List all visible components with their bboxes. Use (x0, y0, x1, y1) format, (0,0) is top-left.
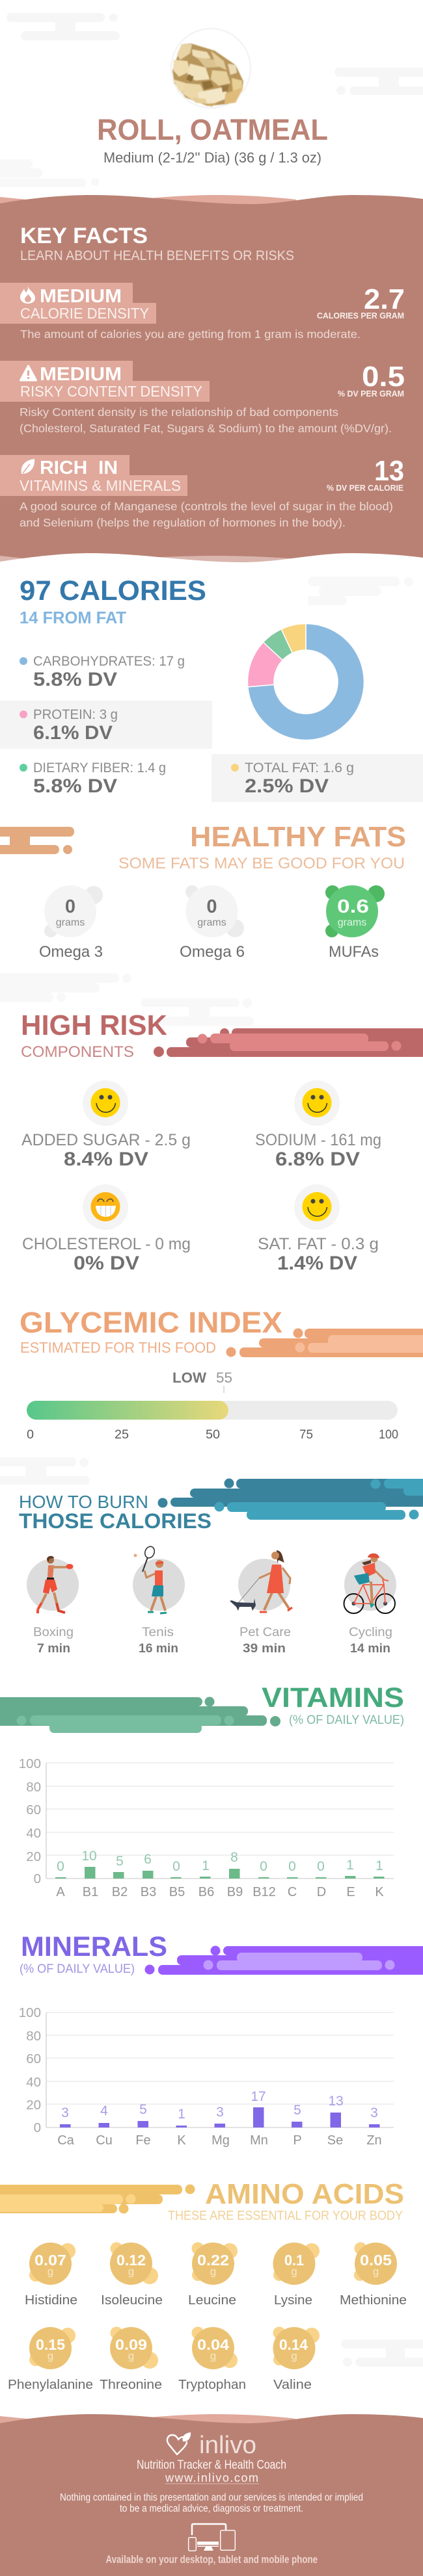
chart: vitamins bar chart: B9 (227, 1885, 243, 1899)
risk item: sodium: 6.8% DV (275, 1149, 360, 1170)
chart: minerals bar chart: 5 (139, 2102, 147, 2117)
risk item: saturated fat: SAT. FAT - 0.3 g (258, 1235, 379, 1253)
chart: glycemic index gauge: 100 (379, 1428, 398, 1442)
fact: rich in vitamins and minerals: % DV PER CALORIE (327, 483, 403, 493)
chart: minerals bar chart: 3 (370, 2105, 378, 2120)
chart: minerals bar chart: 3 (61, 2105, 69, 2120)
chart: vitamins bar chart: 40 (26, 1826, 41, 1841)
risk item: cholesterol: CHOLESTEROL - 0 mg (22, 1235, 191, 1253)
amino: methionine: g (373, 2265, 379, 2278)
fat: omega 6: Omega 6 (180, 943, 245, 961)
chart: vitamins bar chart: 10 (81, 1849, 97, 1864)
chart: minerals bar chart: 4 (100, 2103, 108, 2118)
subheading: vitamins: (% OF DAILY VALUE) (289, 1713, 404, 1727)
chart: minerals bar chart: 80 (26, 2029, 41, 2044)
title: ROLL, OATMEAL (97, 113, 328, 146)
chart: vitamins bar chart: 0 (288, 1859, 296, 1874)
website link: www.inlivo.com (165, 2471, 258, 2484)
chart: minerals bar chart: 100 (19, 2005, 41, 2020)
amino: lysine: 0.1 (284, 2252, 304, 2269)
macro: dietary fiber: 5.8% DV (33, 775, 117, 797)
cloud: calories (308, 577, 413, 605)
chart: minerals bar chart: 20 (26, 2098, 41, 2113)
macro: total fat (212, 754, 423, 802)
amino: leucine: 0.22 (197, 2252, 229, 2269)
chart: minerals bar chart: 5 (293, 2103, 301, 2118)
chart: vitamins bar chart: B5 (169, 1885, 185, 1899)
risk item: added sugar: ADDED SUGAR - 2.5 g (21, 1131, 191, 1149)
amino: histidine: 0.07 (34, 2252, 66, 2269)
amino: isoleucine: 0.12 (116, 2252, 146, 2269)
section: healthy fats (0, 821, 406, 961)
amino: phenylalanine: g (48, 2350, 53, 2362)
chart: minerals bar chart: 17 (251, 2089, 266, 2104)
amino: isoleucine: Isoleucine (101, 2293, 163, 2308)
amino: phenylalanine: Phenylalanine (8, 2378, 93, 2392)
amino: methionine (340, 2243, 407, 2308)
subheading: minerals: (% OF DAILY VALUE) (20, 1962, 135, 1976)
activity: tennis: Tenis (142, 1626, 174, 1639)
risk item: sodium: SODIUM - 161 mg (255, 1131, 381, 1149)
banner: vitamins (0, 1697, 280, 1733)
fat: omega 6 (180, 885, 245, 961)
chart: vitamins bar chart: 0 (57, 1859, 64, 1874)
disclaimer: to be a medical advice, diagnosis or treatment. (120, 2503, 303, 2514)
macro: carbohydrates: 5.8% DV (33, 669, 117, 690)
fact: rich in vitamins and minerals: 13 (374, 455, 404, 487)
amino: leucine: g (210, 2265, 216, 2278)
activity: boxing (27, 1556, 79, 1656)
amino: valine: 0.14 (279, 2336, 308, 2353)
amino: phenylalanine (8, 2327, 93, 2392)
chart: minerals bar chart: P (293, 2133, 302, 2148)
section: minerals (19, 1931, 423, 2148)
icon: warning triangle (21, 366, 36, 380)
section: amino acids (0, 2178, 423, 2392)
amino: valine: Valine (273, 2378, 312, 2392)
risk item: cholesterol: 0% DV (74, 1253, 139, 1274)
section: vitamins (0, 1682, 404, 1899)
amino: tryptophan (178, 2327, 246, 2392)
icon: boxer (38, 1556, 73, 1613)
chart: vitamins bar chart: 0 (34, 1871, 41, 1886)
activity: pet care: 39 min (243, 1642, 286, 1656)
chart: vitamins bar chart: D (317, 1885, 326, 1899)
heading: amino acids: AMINO ACIDS (205, 2178, 404, 2210)
macro: protein: PROTEIN: 3 g (33, 707, 118, 722)
fact: rich in vitamins and minerals (0, 455, 404, 529)
serving size: Medium (2-1/2'' Dia) (36 g / 1.3 oz) (103, 150, 321, 166)
chart: vitamins bar chart: K (375, 1885, 384, 1899)
fat: MUFAs: grams (338, 917, 366, 928)
section: high risk (0, 973, 423, 1274)
fact: risky content density: MEDIUM (40, 364, 122, 385)
amino: valine: g (291, 2350, 297, 2362)
icon: leaf (21, 459, 34, 474)
logo wordmark: inlivo (199, 2432, 256, 2459)
chart: glycemic index gauge: 50 (206, 1428, 220, 1442)
section: how to burn calories (0, 1457, 423, 1656)
subheading: 14 from fat: 14 FROM FAT (20, 608, 126, 627)
label: low 55: LOW (172, 1370, 206, 1386)
fat: omega 3 (39, 885, 103, 961)
subheading: amino acids: THESE ARE ESSENTIAL FOR YOUR BODY (168, 2209, 403, 2223)
fact: risky content density: 0.5 (362, 361, 405, 393)
heading: minerals: MINERALS (21, 1931, 167, 1962)
icon: tennis player (134, 1545, 167, 1613)
chart: vitamins bar chart: B6 (198, 1885, 214, 1899)
fact: risky content density: RISKY CONTENT DENSITY (20, 383, 202, 400)
cloud: top left (7, 13, 120, 40)
chart: vitamins bar chart: B2 (112, 1885, 128, 1899)
fact: calorie density: MEDIUM (40, 286, 122, 307)
header section (0, 13, 423, 187)
macro: protein (0, 701, 212, 749)
chart: vitamins bar chart: 0 (317, 1859, 325, 1874)
cloud: high risk left (0, 973, 131, 1002)
section: glycemic index (20, 1306, 423, 1442)
fat: omega 6: 0 (206, 896, 217, 917)
risk item: cholesterol (22, 1184, 191, 1274)
chart: minerals bar chart: Mn (250, 2133, 268, 2148)
chart: minerals bar chart: Se (327, 2133, 343, 2148)
activity: pet care (230, 1550, 292, 1656)
activity: cycling: Cycling (349, 1626, 392, 1639)
chart: vitamins bar chart: A (56, 1885, 65, 1899)
amino: tryptophan: 0.04 (197, 2336, 229, 2353)
banner: amino acids (0, 2184, 195, 2214)
banner: glycemic index (226, 1329, 423, 1357)
chart: minerals bar chart (19, 2005, 394, 2148)
heading: key facts: KEY FACTS (20, 224, 148, 248)
fact: rich in vitamins and minerals: RICH IN (40, 458, 118, 478)
chart: vitamins bar chart: B1 (83, 1885, 98, 1899)
chart: vitamins bar chart: 6 (144, 1852, 152, 1867)
chart: vitamins bar chart (19, 1756, 394, 1899)
icon: devices (189, 2524, 235, 2551)
label: low 55: 55 (216, 1370, 232, 1386)
risk item: added sugar (21, 1080, 191, 1170)
amino: histidine: Histidine (25, 2293, 77, 2308)
amino: threonine: Threonine (100, 2378, 162, 2392)
activity: boxing: Boxing (33, 1626, 74, 1639)
fat: MUFAs: 0.6 (337, 896, 369, 917)
fact: risky content density (0, 361, 405, 435)
fat: omega 6: grams (197, 917, 226, 928)
risk item: added sugar: 8.4% DV (64, 1149, 148, 1170)
chart: vitamins bar chart: C (288, 1885, 297, 1899)
chart: glycemic index gauge: 0 (27, 1428, 34, 1442)
disclaimer: Nothing contained in this presentation and our services is intended or implied (60, 2492, 363, 2503)
chart: minerals bar chart: Zn (366, 2133, 382, 2148)
heading: high risk: HIGH RISK (21, 1009, 167, 1041)
chart: minerals bar chart: Ca (57, 2133, 75, 2148)
fact: risky content density: Risky Content density is the relationship of bad components (20, 406, 338, 419)
panel: footer (0, 2414, 423, 2576)
tagline: Nutrition Tracker & Health Coach (137, 2458, 286, 2472)
subheading: key facts: LEARN ABOUT HEALTH BENEFITS OR RISKS (20, 248, 294, 263)
icon: cyclist (344, 1554, 395, 1613)
panel: key facts (0, 195, 423, 566)
chart: minerals bar chart: Cu (96, 2133, 113, 2148)
cloud: amino right (341, 2339, 423, 2367)
activity: tennis (133, 1545, 185, 1656)
chart: vitamins bar chart: B3 (141, 1885, 156, 1899)
banner: healthy fats cloud (0, 827, 74, 854)
chart: vitamins bar chart: 0 (260, 1859, 267, 1874)
chart: vitamins bar chart: 80 (26, 1780, 41, 1795)
chart: minerals bar chart: Mg (212, 2133, 230, 2148)
amino: isoleucine: g (128, 2265, 134, 2278)
macro: total fat: TOTAL FAT: 1.6 g (245, 761, 354, 775)
amino: methionine: 0.05 (360, 2252, 392, 2269)
chart: glycemic index gauge (27, 1401, 398, 1442)
risk item: saturated fat: 1.4% DV (277, 1253, 357, 1274)
cloud: lower left (0, 159, 99, 187)
fact: rich in vitamins and minerals: VITAMINS & MINERALS (20, 477, 181, 494)
fat: MUFAs (325, 885, 385, 961)
banner: high risk (154, 1028, 423, 1057)
icon: flame (20, 286, 35, 304)
chart: vitamins bar chart: 60 (26, 1802, 41, 1817)
fact: calorie density: 2.7 (364, 283, 405, 315)
heading: those calories: THOSE CALORIES (19, 1509, 212, 1533)
heading: vitamins: VITAMINS (262, 1682, 404, 1713)
chart: glycemic index gauge: 75 (299, 1428, 313, 1442)
cloud: burn left (0, 1457, 90, 1485)
amino: tryptophan: Tryptophan (178, 2378, 246, 2392)
chart: glycemic index gauge: 25 (115, 1428, 129, 1442)
fact: rich in vitamins and minerals: A good source of Manganese (controls the level of sugar in the blood) (20, 500, 393, 513)
cloud: top right (334, 68, 423, 95)
chart: vitamins bar chart: 100 (19, 1756, 41, 1771)
chart: vitamins bar chart: E (346, 1885, 355, 1899)
amino: phenylalanine: 0.15 (36, 2336, 65, 2353)
fat: omega 3: grams (56, 917, 85, 928)
fact: risky content density: % DV PER GRAM (338, 389, 404, 398)
subheading: components: COMPONENTS (21, 1043, 134, 1061)
banner: burn (157, 1478, 423, 1520)
chart: minerals bar chart: 0 (34, 2120, 41, 2135)
heading: glycemic index: GLYCEMIC INDEX (20, 1306, 282, 1339)
label: low 55 (172, 1370, 232, 1393)
amino: histidine: g (48, 2265, 53, 2278)
amino: tryptophan: g (210, 2350, 216, 2362)
macro: carbohydrates (20, 654, 185, 690)
activity: boxing: 7 min (37, 1642, 70, 1656)
subheading: healthy fats: SOME FATS MAY BE GOOD FOR YOU (118, 855, 405, 872)
fact: calorie density: CALORIES PER GRAM (317, 311, 404, 320)
amino: threonine: g (128, 2350, 134, 2362)
chart: vitamins bar chart: 0 (172, 1859, 180, 1874)
chart: vitamins bar chart: 1 (202, 1858, 210, 1873)
activity: pet care: Pet Care (239, 1626, 291, 1639)
icon: oatmeal flakes photo (171, 29, 251, 108)
amino: histidine (25, 2243, 77, 2308)
macro: total fat: 2.5% DV (245, 775, 329, 797)
chart: minerals bar chart: Fe (135, 2133, 151, 2148)
banner: minerals (144, 1946, 423, 1975)
macro: dietary fiber: DIETARY FIBER: 1.4 g (33, 761, 166, 775)
fat: omega 3: Omega 3 (39, 943, 103, 961)
icon: inlivo heart logo (167, 2432, 191, 2454)
fact: calorie density: The amount of calories you are getting from 1 gram is moderate. (20, 328, 361, 341)
macro: protein: 6.1% DV (33, 722, 113, 744)
activity: cycling: 14 min (350, 1642, 390, 1656)
fat: MUFAs: MUFAs (329, 943, 379, 961)
chart: vitamins bar chart: 1 (375, 1858, 383, 1873)
chart: minerals bar chart: 13 (328, 2094, 344, 2109)
heading: 97 calories: 97 CALORIES (20, 575, 206, 606)
amino: isoleucine (101, 2243, 163, 2308)
activity: tennis: 16 min (139, 1642, 178, 1656)
amino: threonine (100, 2327, 162, 2392)
macro: dietary fiber (20, 761, 166, 797)
fat: omega 3: 0 (65, 896, 75, 917)
availability note: Available on your desktop, tablet and mobile phone (105, 2554, 318, 2566)
subheading: glycemic index: ESTIMATED FOR THIS FOOD (20, 1339, 216, 1356)
fact: risky content density: (Cholesterol, Saturated Fat, Sugars & Sodium) to the amount (%DV/gr). (20, 422, 392, 435)
amino: methionine: Methionine (340, 2293, 407, 2308)
risk item: saturated fat (258, 1184, 379, 1274)
chart: vitamins bar chart: B12 (252, 1885, 276, 1899)
chart: minerals bar chart: 60 (26, 2051, 41, 2066)
amino: valine (273, 2327, 320, 2392)
fact: rich in vitamins and minerals: and Selenium (helps the regulation of hormones in the body). (20, 516, 346, 529)
heading: healthy fats: HEALTHY FATS (190, 821, 406, 853)
amino: lysine: g (291, 2265, 297, 2278)
chart: minerals bar chart: 1 (178, 2107, 185, 2122)
section: calories (0, 575, 423, 802)
chart: minerals bar chart: 40 (26, 2075, 41, 2090)
cloud: high risk center (141, 998, 254, 1026)
amino: threonine: 0.09 (115, 2336, 147, 2353)
chart: vitamins bar chart: 5 (116, 1854, 124, 1869)
chart: vitamins bar chart: 20 (26, 1849, 41, 1864)
heading: how to burn: HOW TO BURN (19, 1492, 148, 1512)
icon: woman walking dog (230, 1550, 292, 1612)
amino: lysine (273, 2243, 320, 2308)
activity: cycling (344, 1554, 396, 1656)
chart: minerals bar chart: 3 (216, 2105, 224, 2120)
chart: minerals bar chart: K (177, 2133, 186, 2148)
chart: macro donut (247, 624, 364, 740)
chart: vitamins bar chart: 8 (230, 1850, 238, 1865)
amino: leucine (188, 2243, 238, 2308)
fact: calorie density: CALORIE DENSITY (20, 305, 149, 322)
fact: calorie density (0, 283, 405, 341)
amino: leucine: Leucine (188, 2293, 236, 2308)
risk item: sodium (255, 1080, 381, 1170)
amino: lysine: Lysine (274, 2293, 312, 2308)
macro: carbohydrates: CARBOHYDRATES: 17 g (33, 654, 185, 669)
disclaimer (60, 2492, 363, 2514)
chart: vitamins bar chart: 1 (346, 1858, 354, 1873)
